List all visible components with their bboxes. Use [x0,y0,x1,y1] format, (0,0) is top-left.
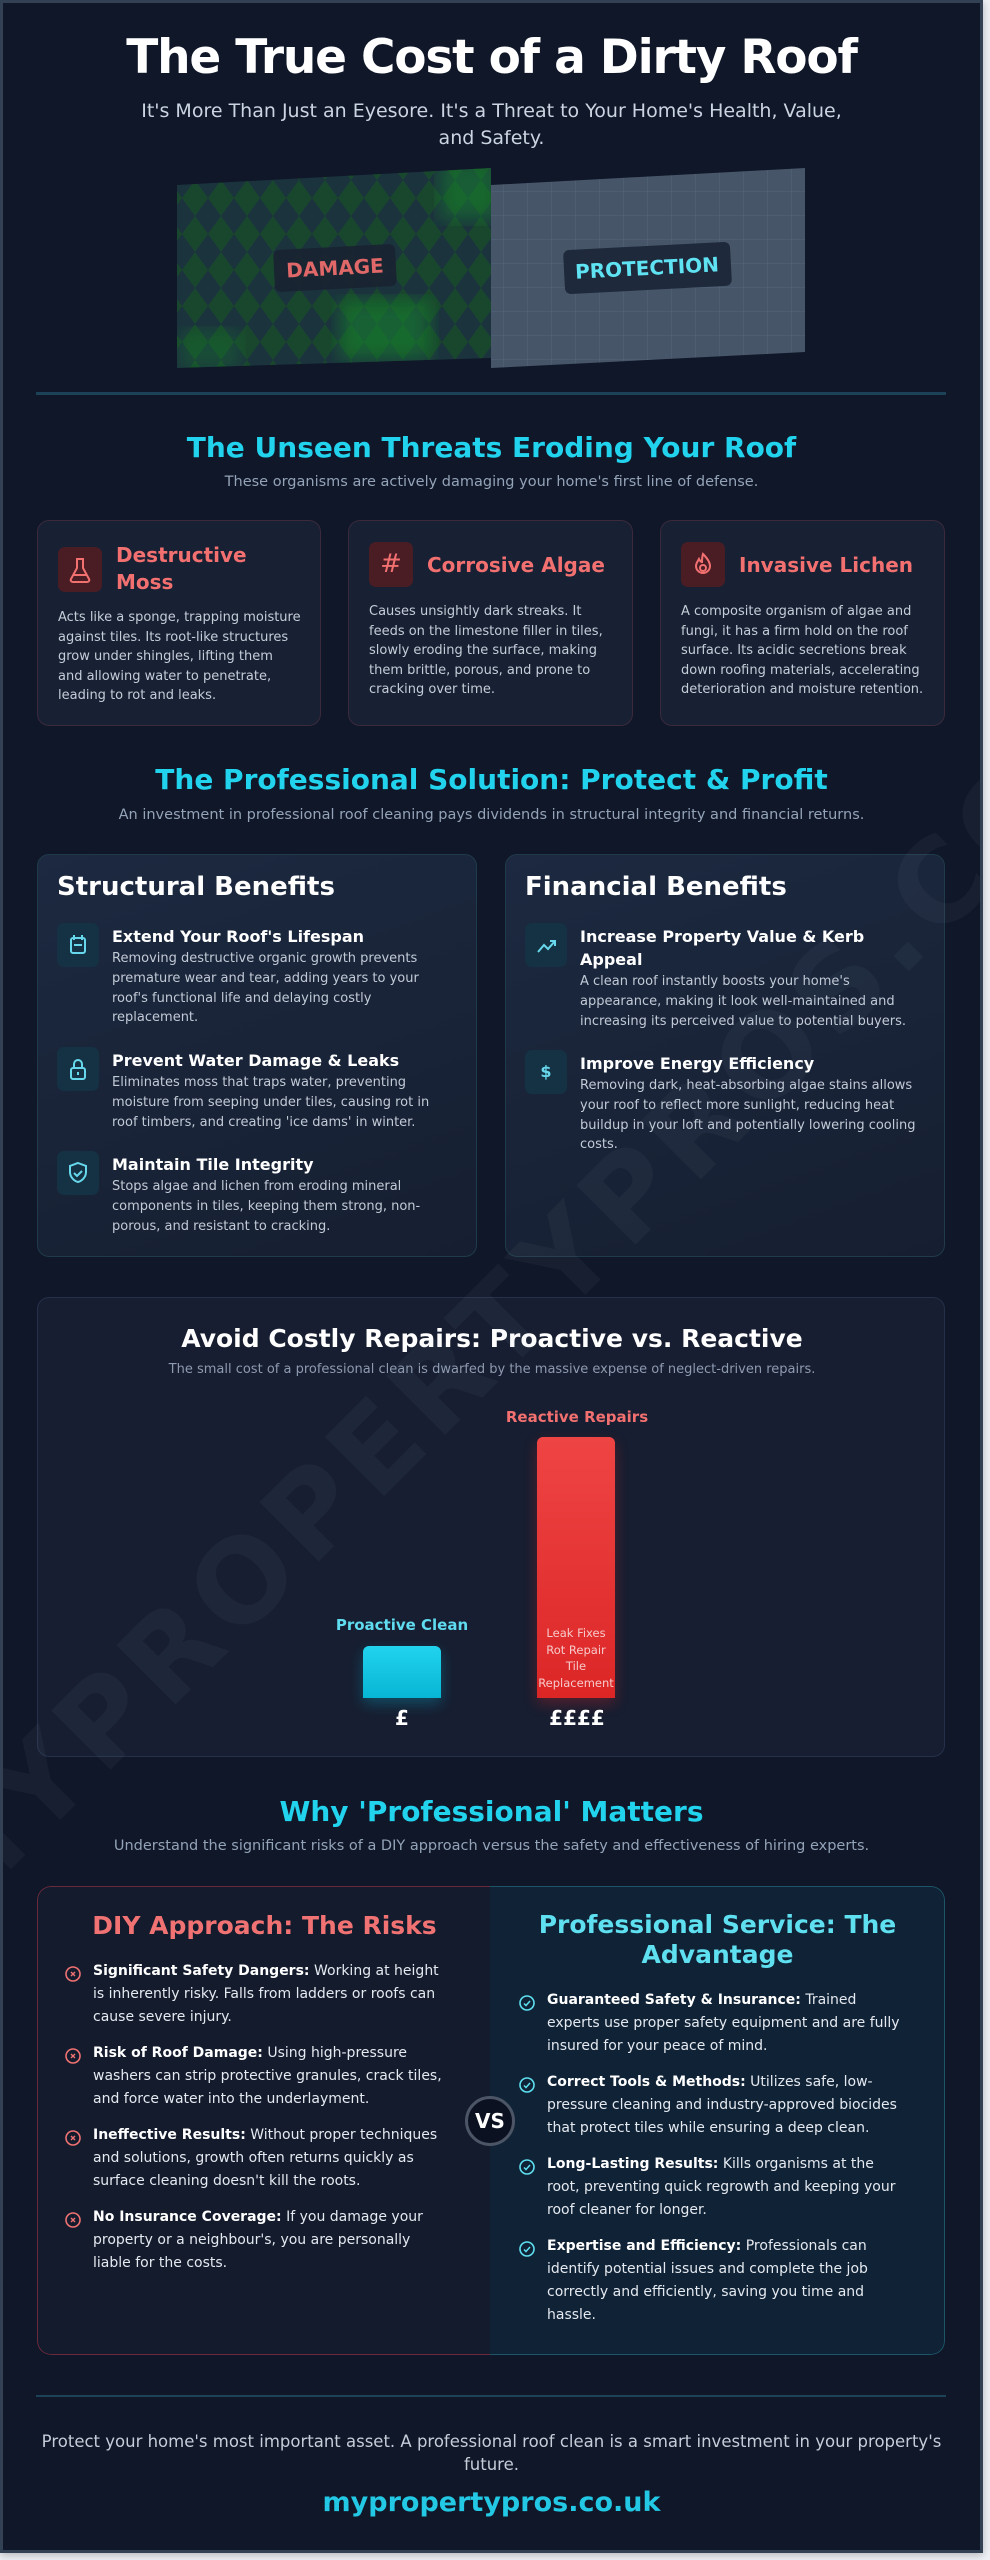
label: damage [273,244,397,292]
card text: and allowing water to penetrate, [58,668,271,684]
benefit: energy [525,1050,915,1152]
icon: hash: # [380,549,402,579]
panel: corrosive algae [348,520,633,726]
label: damage: DAMAGE [286,253,384,283]
card text: deterioration and moisture retention. [681,682,923,697]
risk item: roof damage: and force water into the underlayment. [93,2091,369,2107]
risk item: insurance: property or a neighbour's, you are personally [93,2232,410,2248]
risk item: roof damage [65,2045,442,2107]
icon: flame [681,542,725,587]
risk item: roof damage: washers can strip protective granules, crack tiles, [93,2068,442,2084]
panel: protection roof [491,168,805,368]
card title: Invasive Lichen [739,553,913,577]
hero illustration: damage vs protection [177,168,805,368]
bar: reactive repairs [506,1408,648,1730]
heading: professional solution: The Professional Solution: Protect & Profit [155,763,828,796]
bar: proactive clean: Proactive Clean [336,1616,468,1634]
chart title: Avoid Costly Repairs: Proactive vs. Reactive [181,1324,803,1353]
benefit: tile integrity: porous, and resistant to cracking. [112,1219,330,1234]
icon: lock [57,1047,99,1091]
VS badge [465,2096,515,2146]
card text: Acts like a sponge, trapping moisture [58,610,301,625]
subtitle: It's More Than Just an Eyesore. It's a Threat to Your Home's Health, Value, [141,100,842,122]
panel: damage roof [177,168,491,368]
advantage item: expertise: Expertise and Efficiency: Professionals can [547,2238,867,2254]
card text: leading to rot and leaks. [58,688,216,703]
icon: dollar [525,1050,567,1094]
benefit: energy: your roof to reflect more sunlight, reducing heat [580,1098,894,1113]
advantage item: long-lasting: root, preventing quick regrowth and keeping your [547,2179,896,2195]
panel heading: Structural Benefits [57,872,335,902]
card title: Destructive [116,543,247,567]
icon: hash [369,542,413,587]
advantage item: expertise: correctly and efficiently, saving you time and [547,2284,864,2300]
card text: A composite organism of algae and [681,604,911,619]
advantage item: expertise: identify potential issues and complete the job [547,2261,868,2277]
card text: grow under shingles, lifting them [58,649,273,664]
risk item: insurance: No Insurance Coverage: If you damage your [93,2209,423,2225]
advantage item: safety [519,1992,900,2054]
subtitle: and Safety. [439,127,544,149]
panel: invasive lichen [660,520,945,726]
card title [116,543,247,594]
card text: Causes unsightly dark streaks. It [369,604,581,619]
advantage item: tools: that protect tiles while ensuring a deep clean. [547,2120,869,2136]
benefit: tile integrity: Stops algae and lichen from eroding mineral [112,1179,401,1194]
benefit: energy: buildup in your loft and potentially lowering cooling [580,1118,915,1133]
subheading: Understand the significant risks of a DIY approach versus the safety and effectiveness of hiring experts. [114,1838,869,1854]
card text: cracking over time. [369,682,495,697]
benefit: lifespan: Removing destructive organic growth prevents [112,951,417,966]
card text [681,604,923,697]
card text: feeds on the limestone filler in tiles, [369,624,603,638]
icon: dollar: $ [540,1062,552,1081]
bar: proactive clean [336,1616,468,1730]
risk item: insurance: liable for the costs. [93,2255,227,2271]
advantage item: safety: insured for your peace of mind. [547,2038,767,2054]
card text: them brittle, porous, and prone to [369,662,590,678]
panel: comparison [37,1886,945,2355]
chart subtitle: The small cost of a professional clean is dwarfed by the massive expense of neglect-driven repairs. [169,1362,815,1377]
column heading: Professional Service: The [539,1910,896,1939]
panel heading: Financial Benefits [525,872,787,902]
bar: reactive repairs: Tile [566,1659,586,1673]
footer text: Protect your home's most important asset. A professional roof clean is a smart investment in your property's future. [42,2432,941,2474]
heading: why professional: Why 'Professional' Matters [279,1795,704,1828]
icon: flask [58,547,102,592]
bar: reactive repairs: Rot Repair [546,1642,606,1656]
panel: destructive moss [37,520,321,726]
risk item: safety [65,1963,439,2025]
panel: cost chart [37,1297,945,1757]
benefit: tile integrity [57,1151,420,1234]
advantage item: tools: Correct Tools & Methods: Utilizes safe, low- [547,2074,873,2090]
card text: surface. Its acidic secretions break [681,643,907,658]
benefit: lifespan: replacement. [112,1010,198,1025]
advantage item: expertise: hassle. [547,2307,596,2323]
risk item: safety: cause severe injury. [93,2009,232,2025]
bar: reactive repairs: Leak Fixes [546,1626,606,1640]
benefit: property value: Increase Property Value & Kerb [580,927,864,946]
benefit: water damage: Eliminates moss that traps water, preventing [112,1075,406,1090]
bar: reactive repairs: Replacement [538,1676,614,1690]
card text [369,604,603,697]
advantage item: tools: pressure cleaning and industry-approved biocides [547,2097,897,2113]
advantage item: safety: Guaranteed Safety & Insurance: Trained [547,1992,856,2008]
benefit: property value: increasing its perceived value to potential buyers. [580,1014,906,1029]
benefit: property value [525,923,906,1029]
card text: down roofing materials, accelerating [681,662,920,678]
title: The True Cost of a Dirty Roof [126,30,857,85]
benefit: property value: Appeal [580,950,642,969]
VS badge: VS [475,2109,505,2133]
benefit: lifespan: roof's functional life and delaying costly [112,991,371,1006]
benefit: property value: appearance, making it look well-maintained and [580,994,895,1009]
benefit: water damage: Prevent Water Damage & Leaks [112,1051,399,1070]
advantage item: long-lasting [519,2156,896,2218]
column: DIY risks [37,1886,490,2355]
advantage item: tools [519,2074,897,2136]
benefit: property value: A clean roof instantly boosts your home's [580,974,850,989]
risk item: ineffective [65,2127,437,2189]
risk item: ineffective: and solutions, growth often returns quickly as [93,2150,414,2166]
column: professional advantage [490,1886,945,2355]
benefit: lifespan: Extend Your Roof's Lifespan [112,927,364,946]
card text: fungi, it has a firm hold on the roof [681,624,908,638]
card text: against tiles. Its root-like structures [58,630,288,644]
footer url: mypropertypros.co.uk [323,2487,660,2518]
risk item: safety: Significant Safety Dangers: Working at height [93,1963,439,1979]
benefit: energy: Improve Energy Efficiency [580,1054,814,1073]
benefit: tile integrity: Maintain Tile Integrity [112,1155,314,1174]
benefit: water damage [57,1047,429,1130]
column heading: Advantage [642,1940,793,1969]
card text: slowly eroding the surface, making [369,643,597,658]
benefit: lifespan [57,923,419,1025]
panel: financial benefits [505,854,945,1257]
subheading: An investment in professional roof cleaning pays dividends in structural integrity and financial returns. [119,807,864,823]
bar: reactive repairs: ££££ [549,1706,605,1730]
DIY risk list [65,1963,442,2271]
card title: Moss [116,570,173,594]
advantage item: expertise [519,2238,868,2323]
benefit: energy: costs. [580,1137,618,1152]
column heading: DIY Approach: The Risks [92,1911,437,1940]
label: protection: PROTECTION [575,252,719,284]
professional advantage list [519,1992,900,2323]
risk item: safety: is inherently risky. Falls from ladders or roofs can [93,1986,435,2002]
risk item: insurance [65,2209,423,2271]
benefit: energy: Removing dark, heat-absorbing algae stains allows [580,1078,912,1093]
heading: unseen threats: The Unseen Threats Eroding Your Roof [187,431,796,464]
benefit: lifespan: premature wear and tear, adding years to your [112,971,419,986]
subtitle [141,100,842,149]
icon: trend [525,923,567,967]
advantage item: safety: experts use proper safety equipment and are fully [547,2015,900,2031]
card title: Corrosive Algae [427,553,605,577]
advantage item: long-lasting: roof cleaner for longer. [547,2202,707,2218]
bar: proactive clean: £ [395,1706,409,1730]
advantage item: long-lasting: Long-Lasting Results: Kills organisms at the [547,2156,874,2172]
benefit: tile integrity: components in tiles, keeping them strong, non- [112,1199,420,1214]
benefit: water damage: roof timbers, and creating 'ice dams' in winter. [112,1115,415,1130]
icon: calendar [57,923,99,967]
card text [58,610,301,703]
subheading: These organisms are actively damaging your home's first line of defense. [225,474,758,490]
bar: reactive repairs: Reactive Repairs [506,1408,648,1426]
benefit: water damage: moisture from seeping under tiles, causing rot in [112,1095,429,1110]
risk item: ineffective: Ineffective Results: Without proper techniques [93,2127,437,2143]
icon: shield [57,1151,99,1195]
risk item: ineffective: surface cleaning doesn't kill the roots. [93,2173,360,2189]
risk item: roof damage: Risk of Roof Damage: Using high-pressure [93,2045,407,2061]
panel: structural benefits [37,854,477,1257]
label: protection [563,242,732,294]
column heading [539,1910,896,1969]
